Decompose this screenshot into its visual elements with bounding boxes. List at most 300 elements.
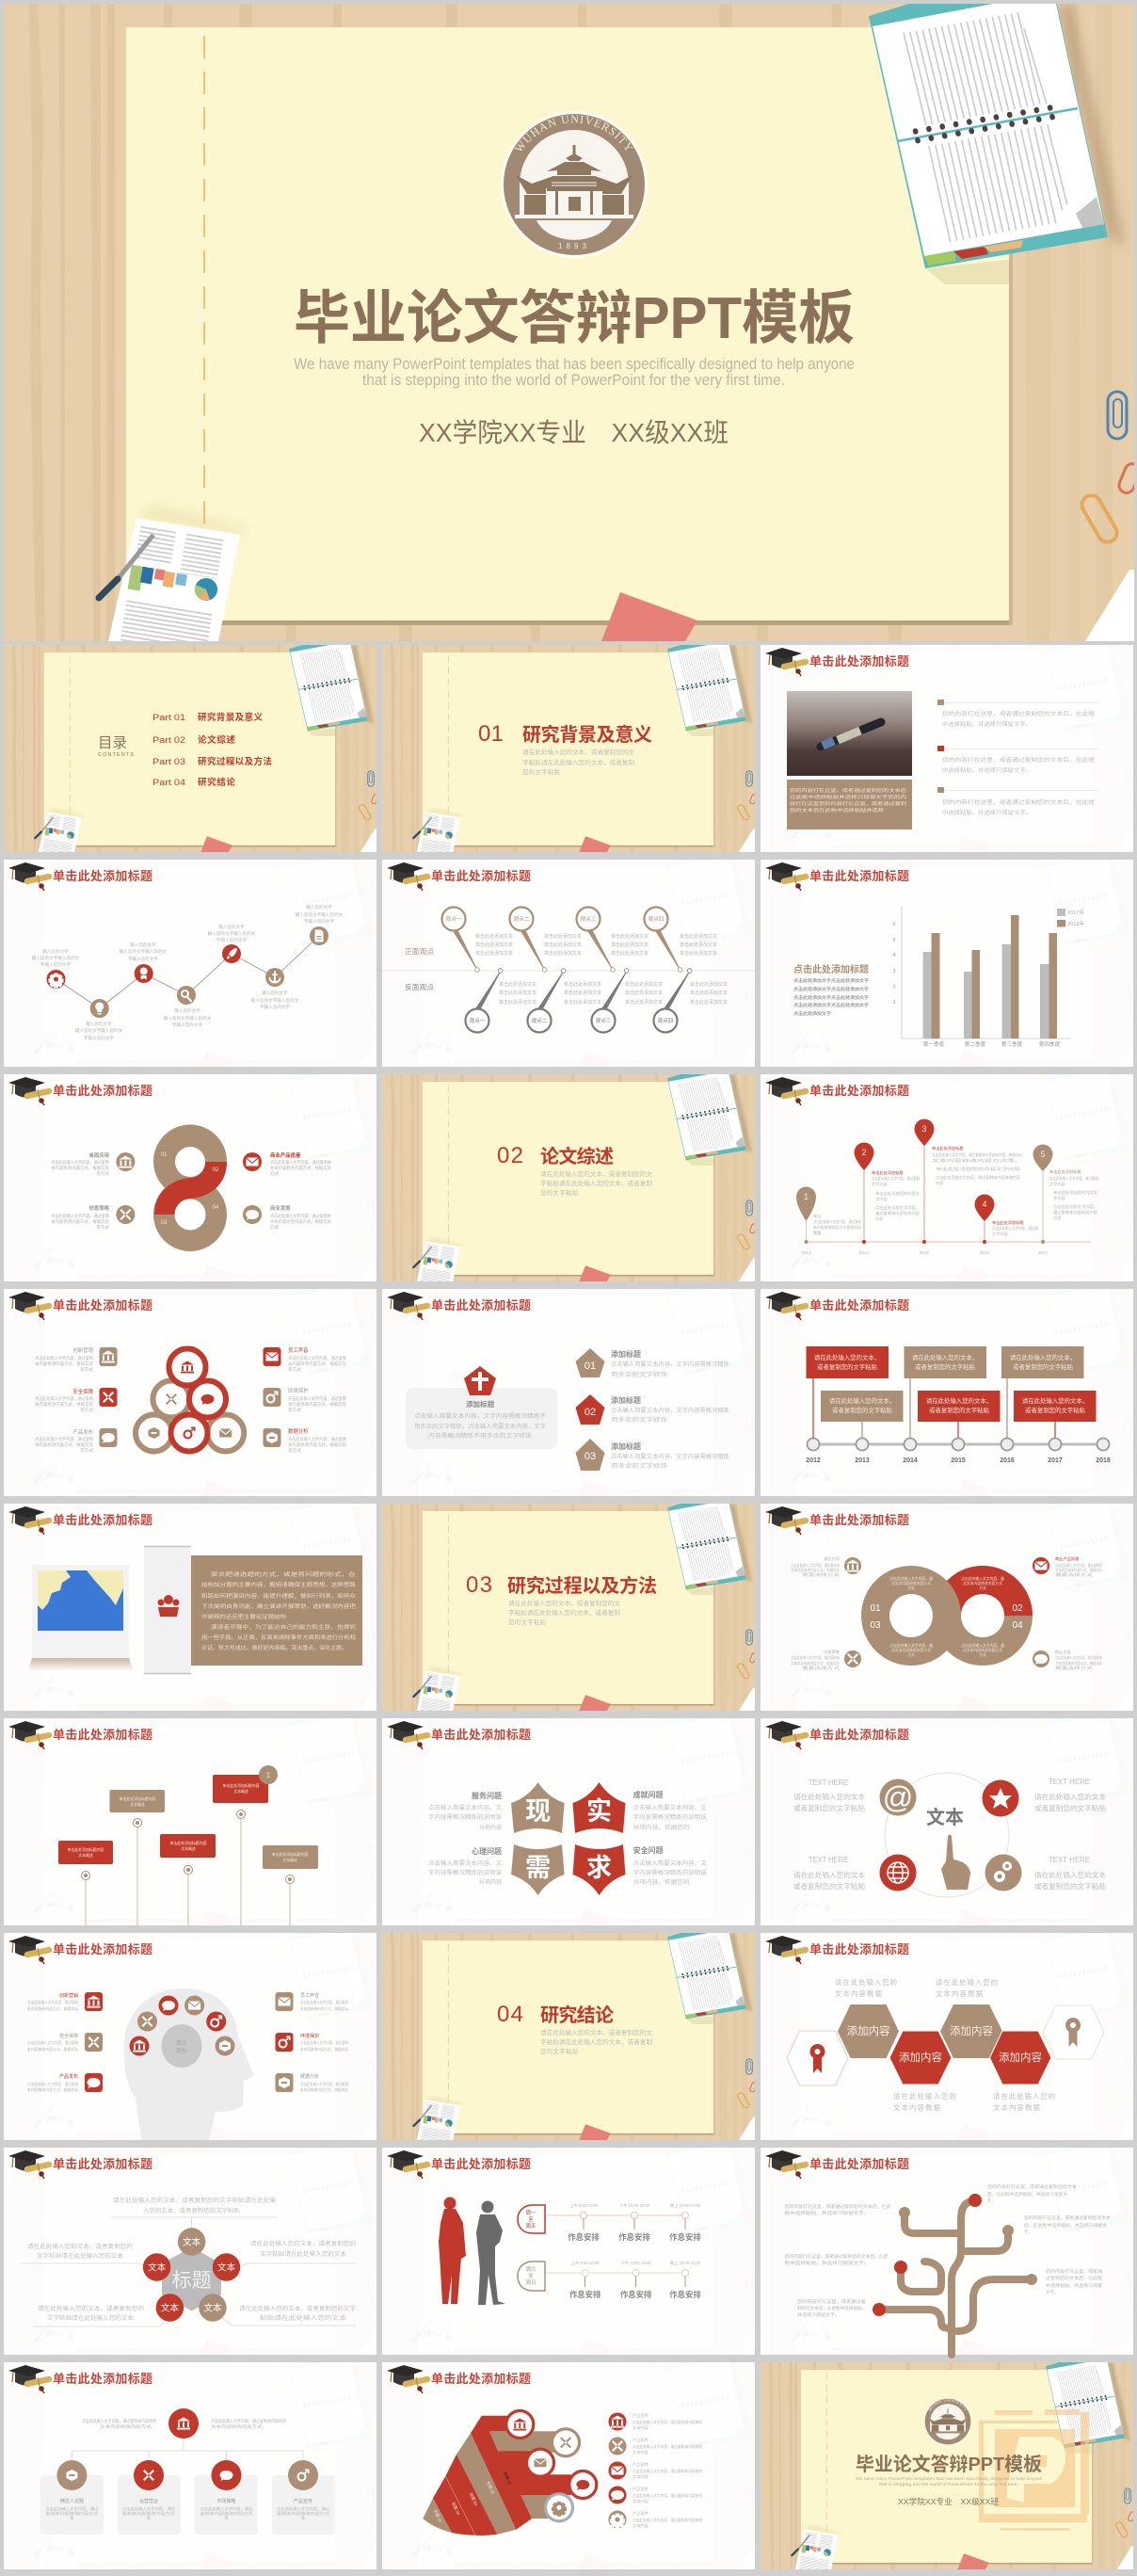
fishbone diagram: 观点三 <box>581 916 597 923</box>
side icons <box>85 1992 294 2092</box>
section text <box>540 1169 653 1197</box>
center goal <box>162 2024 201 2068</box>
header <box>387 1292 531 1320</box>
chart title and text: 点击此处添加标题 <box>793 963 869 975</box>
timeline text: 点击此处添加文字内容， <box>1053 1203 1097 1210</box>
fishbone text: 单击此处添加文本 <box>611 933 649 940</box>
side text: 数据分析 <box>300 2073 319 2080</box>
timeline text: 字内容 <box>1053 1195 1065 1201</box>
chart legend: 2017年 <box>1067 909 1084 916</box>
bar chart: 第三季度 <box>1001 1040 1023 1048</box>
side text: 点击此处输入文字内容，通过复制 <box>300 2081 348 2087</box>
zigzag labels: 输入您的文字输入您的文 <box>120 948 168 955</box>
contents list: Part 03 <box>152 757 185 767</box>
side labels: 反面观点 <box>405 982 434 991</box>
timeline text: 内容 <box>875 1216 883 1222</box>
text boxes: 单击此处添加标题内容 <box>170 1841 207 1845</box>
header: 单击此处添加标题 <box>53 1728 152 1742</box>
bar chart: 第四季度 <box>1039 1040 1061 1048</box>
labels right: 商业发展 <box>270 1204 291 1212</box>
header <box>387 862 531 891</box>
pentagon items: 01 <box>585 1360 596 1372</box>
panel text: 点击此处输入文字内容，通过 <box>122 2505 176 2512</box>
header <box>765 648 909 676</box>
left text: 本内容修改内容方式，根据实际 <box>35 1360 93 1367</box>
right text: 等方式 <box>288 1366 301 1373</box>
section text: 您的文字粘贴 <box>508 1618 547 1626</box>
side text: 本内容修改内容方式，根据实际 <box>27 2046 78 2053</box>
right text: 字内容需概况精炼的说明该 <box>633 1869 707 1876</box>
text boxes: 单击此处添加标题内容 <box>68 1847 104 1852</box>
closing subtitle: that is stepping into the world of PowerPoint for the very first time. <box>879 2482 1018 2487</box>
side text: 本内容修改内容方式，根据实际 <box>300 2005 348 2012</box>
timeline text: 点击此处输入文字内容，通过复制 <box>813 1218 861 1225</box>
section text: 字粘贴请在此处输入您的文本，或者复制 <box>522 758 634 766</box>
labels left: 点击此处输入文字内容，通过复制 <box>51 1213 109 1219</box>
zigzag labels: 输入您的文字输入您的文 <box>75 1027 123 1034</box>
four word shapes: 实 <box>586 1797 612 1826</box>
contents list <box>152 712 272 788</box>
header: 单击此处添加标题 <box>809 1942 909 1956</box>
bar chart: 3 <box>892 969 896 974</box>
infinity rings: 02 <box>1012 1603 1023 1614</box>
text list: 您的内容打在这里，或者通过复制您的文本后，在此框 <box>942 798 1095 806</box>
timeline: 2013 <box>801 1250 811 1255</box>
slide: cover <box>4 4 1134 641</box>
right text: 分项内容，依据您的 <box>633 1878 690 1886</box>
tree text: 字。 <box>1024 2229 1033 2234</box>
side text: 本内容修改内容方式，根据实际 <box>27 2005 78 2012</box>
pentagon items: 点击输入简要文本内容，文字内容需概况精炼 <box>611 1360 729 1368</box>
figure eight diagram: 02 <box>213 1167 219 1173</box>
header: 单击此处添加标题 <box>53 2157 152 2171</box>
right text: 等方式 <box>288 1407 301 1413</box>
slide: figure eight <box>4 1073 379 1287</box>
zigzag labels: 输入您的文字输入您的文 <box>164 1015 212 1022</box>
corner text: 文本内容修改内容方式，根据实际 <box>791 1567 840 1573</box>
header: 单击此处添加标题 <box>53 1084 152 1098</box>
side text: 点击此处输入文字内容，通过复制 <box>27 1999 78 2005</box>
zigzag labels: 输入您的文字 <box>86 1021 112 1027</box>
timeline text: 内容 <box>1053 1215 1061 1221</box>
fishbone text: 单击此处添加文本 <box>564 999 601 1006</box>
text boxes: 文本概述 <box>181 1846 196 1851</box>
timeline text: 点击此处输入文字内容，通过复制本内容修改内容，根据实际 <box>932 1151 1022 1158</box>
title: 毕业论文答辩PPT模板 <box>294 286 855 351</box>
four word shapes: 求 <box>586 1854 612 1882</box>
section text: 字粘贴请在此处输入您的文本，或者复制 <box>508 1608 620 1617</box>
infinity rings: 点击此处输入文字内容，通 <box>889 1643 933 1648</box>
schedule row: weekdays: 作息安排 <box>568 2232 600 2242</box>
header <box>765 2150 909 2179</box>
cone diagram: 标题 02 <box>485 2480 497 2496</box>
brown text panel <box>191 1555 362 1666</box>
labels left <box>51 1151 110 1231</box>
schedule row: weekend: 上午 8:00-12:00 <box>571 2260 600 2266</box>
header: 单击此处添加标题 <box>53 1298 152 1312</box>
header: 单击此处添加标题 <box>809 654 909 668</box>
brown text box: 容打在这里您的内容打在这里，或者通过复制 <box>790 800 907 807</box>
year axis: 2017 <box>1048 1457 1063 1464</box>
side text: 点击此处输入文字内容，通过复制 <box>27 2081 78 2087</box>
panel: add title: 点击输入简要文本内容，文字内容需概况精炼不 <box>414 1412 546 1420</box>
bar chart <box>892 906 1071 1048</box>
timeline boxes: 请在此处输入您的文本， <box>1010 1353 1076 1361</box>
brown text panel: 用一些手段。从正面，反面来阐释事件方面和来进行分析和 <box>201 1634 356 1641</box>
section number and title: 论文综述 <box>540 1145 614 1167</box>
petal diagram: 文本 <box>203 2303 222 2314</box>
left text: 本内容修改内容方式，根据实际 <box>35 1401 93 1408</box>
timeline text: 单击此处添加标题 <box>932 1145 964 1151</box>
slide: ring pyramid <box>4 1288 379 1502</box>
chart title and text: 点击此处添加文字点击此处添加文字 <box>793 994 869 1001</box>
side text: 员工声音 <box>300 1992 319 1999</box>
timeline text <box>813 1145 1098 1237</box>
hexagon captions <box>835 1978 1055 2112</box>
left text: 点击输入简要文本内容。文 <box>428 1804 502 1811</box>
pentagon items: 添加标题 <box>611 1395 641 1405</box>
schedule row: weekend: 周六 <box>526 2265 536 2273</box>
list text: 文本内容 <box>633 2498 649 2504</box>
right text: 环境保护 <box>288 1387 309 1394</box>
hexagon chain: 添加内容 <box>950 2024 993 2037</box>
left text: 分项内容 <box>479 1878 502 1886</box>
corner text: 点击此处输入文字内容，通过复制本 <box>1055 1654 1103 1661</box>
fishbone text: 单击此处添加文本 <box>690 981 728 988</box>
side text: 点击此处输入文字内容，通过复制 <box>300 2039 348 2046</box>
left text: 点击输入简要文本内容。文 <box>428 1860 502 1867</box>
timeline text: 通过复制本内容修改内容 <box>875 1210 920 1216</box>
fishbone text: 单击此处添加文本 <box>475 942 513 948</box>
fishbone diagram: 观点四 <box>658 1018 674 1024</box>
list text: 点击此处输入文字内容，通过复制本内容修改 <box>633 2492 703 2499</box>
schedule row: weekdays: 作息安排 <box>618 2232 650 2242</box>
timeline text: 单击此处添加标题 <box>1049 1168 1081 1175</box>
schedule row: weekend: 至 <box>528 2273 534 2279</box>
tree text: 您的内容打在这里，或者通过复 <box>797 2298 867 2305</box>
side labels <box>405 947 434 991</box>
section text: 请在此处输入您的文本，或者复制您的文 <box>508 1599 621 1607</box>
labels right: 文本内容修改内容方式，根据实际 <box>270 1165 331 1171</box>
right text: 点击输入简要文本内容。文 <box>633 1804 707 1811</box>
middle card with people icon <box>144 1546 191 1674</box>
petal diagram: 文本 <box>161 2303 179 2314</box>
side text: 安全保障 <box>59 2033 78 2039</box>
slide: map and text <box>4 1503 379 1716</box>
panel: add title: 添加标题 <box>466 1399 495 1409</box>
chart title and text: 点击此处添加文字 <box>793 1010 831 1017</box>
header: 单击此处添加标题 <box>431 2157 531 2171</box>
section number and title: 研究结论 <box>540 2004 614 2026</box>
zigzag labels: 字输入您的文字 <box>304 918 334 925</box>
tree text: 并选择只保留文字。 <box>797 2311 840 2318</box>
hexagon captions: 请在此处输入您的 <box>993 2092 1055 2101</box>
schedule row: weekdays: 晚上 19:00-22:00 <box>670 2202 701 2209</box>
header <box>765 1506 909 1535</box>
panel text: 市场策略 <box>216 2498 236 2504</box>
panel text: 等 <box>147 2515 151 2520</box>
slide: schedule <box>382 2147 758 2360</box>
header <box>387 2365 531 2393</box>
tree text: 您的内容打在这里，或者通过复制您的文本 <box>1024 2214 1112 2221</box>
section text: 字粘贴请在此处输入您的文本，或者复制 <box>540 1179 652 1187</box>
section text: 您的文字粘贴 <box>540 2047 579 2055</box>
slide: fishbone <box>382 859 758 1072</box>
fishbone text: 单击此处添加文本 <box>680 933 717 940</box>
figure eight diagram: 03 <box>161 1220 168 1226</box>
text list <box>937 700 1098 816</box>
corner text: 商业产品质量 <box>1055 1555 1079 1562</box>
infinity rings: 过文本内容修改内容方式 <box>963 1648 1002 1652</box>
right text <box>288 1346 346 1454</box>
panel: add title: 用多余的文字修饰，点击输入简要文本内容，文字 <box>414 1423 546 1430</box>
chart title and text: 点击此处添加文字点击此处添加文字 <box>793 977 869 984</box>
icon ring <box>879 1773 1022 1897</box>
infinity rings: 方式 <box>979 1586 986 1590</box>
brown text box <box>787 780 912 829</box>
section text: 字粘贴请在此处输入您的文本，或者复制 <box>540 2037 652 2046</box>
side text: 环境保护 <box>300 2033 319 2039</box>
closing department line: XX学院XX专业 XX级XX班 <box>898 2496 999 2506</box>
zigzag labels: 输入您的文字 <box>42 948 69 955</box>
slide: pin timeline <box>761 1073 1136 1287</box>
tree text: 制您的文本后，在此框中选择粘贴， <box>797 2305 866 2311</box>
contents list: 研究背景及意义 <box>198 712 263 723</box>
pentagon items <box>576 1348 729 1471</box>
tree diagram <box>873 2194 1037 2355</box>
year axis: 2013 <box>855 1457 870 1464</box>
side text <box>27 1992 348 2093</box>
left text: 等方式 <box>80 1407 93 1413</box>
petal diagram: 文本 <box>217 2262 235 2273</box>
ring text: 或者复制您的文字粘贴 <box>1034 1882 1106 1891</box>
fishbone diagram: 观点二 <box>514 916 530 923</box>
hexagon captions: 文本内容数据 <box>936 1989 984 1998</box>
logo: Wuhan University seal: WUHAN UNIVERSITY <box>514 115 633 151</box>
list text: 点击此处输入文字内容，通过复制本内容修改 <box>633 2443 703 2450</box>
infinity rings: 方式 <box>907 1652 915 1657</box>
left text <box>428 1791 502 1886</box>
right text: 成就问题 <box>633 1790 664 1799</box>
fishbone text: 单击此处添加文本 <box>499 990 536 996</box>
text list: 中选择粘贴，并选择只保留文字。 <box>942 766 1032 774</box>
ring text: 请在此处输入您的文本 <box>793 1871 865 1879</box>
slide: four words <box>382 1717 758 1931</box>
ring text: TEXT HERE <box>1049 1778 1090 1786</box>
hexagon captions: 文本内容数据 <box>993 2103 1041 2112</box>
header <box>765 862 909 891</box>
text list: 您的内容打在这里，或者通过复制您的文本后，在此框 <box>942 756 1095 764</box>
right text: 点击输入简要文本内容。文 <box>633 1860 707 1867</box>
header <box>8 2150 152 2179</box>
subtitle <box>294 355 855 389</box>
timeline text: 文字内容 <box>872 1181 888 1187</box>
labels left: 桌面应用 <box>88 1151 109 1159</box>
logo: Wuhan University seal <box>924 2397 971 2446</box>
panel text: 复制本内容修改内容方式 <box>200 2510 253 2517</box>
header <box>765 1721 909 1749</box>
tree text: 框中选择粘贴，并选择只保留文字。 <box>785 2210 870 2216</box>
figure eight diagram: 04 <box>213 1205 219 1211</box>
timeline text: 单击 <box>813 1213 821 1219</box>
ring text: 请在此处输入您的文本 <box>1034 1793 1106 1801</box>
petal text: 请在此处输入您的文本，或者复制您的 <box>250 2240 356 2247</box>
timeline text: 需要 <box>813 1231 821 1236</box>
header: 单击此处添加标题 <box>809 2157 909 2171</box>
infinity rings: 01 <box>870 1603 881 1614</box>
schedule row: weekend <box>518 2260 701 2299</box>
text boxes: 单击此处添加标题内容 <box>223 1783 260 1788</box>
left text: 字内容需概况精炼的说明该 <box>428 1813 502 1821</box>
fishbone text: 单击此处添加文本 <box>625 999 663 1006</box>
infinity rings: 点击此处输入文字内容，通 <box>961 1576 1004 1581</box>
zigzag labels: 输入您的文字 <box>130 942 156 948</box>
list icons <box>608 2412 627 2529</box>
bar chart: 5 <box>892 938 896 943</box>
panel text: 等 <box>224 2515 229 2520</box>
post lines <box>81 1810 294 1925</box>
schedule row: weekdays: 下午 13:00-18:00 <box>619 2202 650 2209</box>
map frame <box>28 1565 134 1671</box>
ring text: 或者复制您的文字粘贴 <box>793 1804 865 1812</box>
slide: post boxes <box>4 1717 379 1931</box>
corner text: 商业发展 <box>1055 1649 1072 1655</box>
schedule row: weekend: 周日 <box>526 2279 536 2286</box>
fishbone text: 单击此处添加文本 <box>544 933 582 940</box>
zigzag labels: 字输入您的文字 <box>40 961 71 968</box>
header: 单击此处添加标题 <box>809 1728 909 1742</box>
icon ring: @ <box>883 1780 913 1814</box>
fishbone text: 单击此处添加文本 <box>544 942 582 948</box>
left text: 字内容需概况精炼的说明该 <box>428 1869 502 1876</box>
slide: section 03 <box>382 1503 758 1716</box>
schedule row: weekdays: 上午 8:00-12:00 <box>569 2202 598 2209</box>
header: 单击此处添加标题 <box>53 1942 152 1956</box>
fishbone text: 单击此处添加文本 <box>475 950 513 957</box>
text boxes: 单击此处添加标题内容 <box>120 1796 156 1801</box>
panel text: 精达人议题 <box>60 2498 84 2504</box>
timeline text: 文本内容修改内容方式等。 <box>932 1157 1022 1164</box>
section text <box>508 1599 621 1626</box>
brown text panel: 演讲者开展中，为了能达自己的能力和主张，也得到 <box>211 1623 356 1631</box>
section number and title <box>466 1572 657 1598</box>
fishbone text: 单击此处添加文本 <box>564 981 601 988</box>
brown text panel: 下次阐明自身功能，确立演讲开展策划，选好概况内容把 <box>201 1602 356 1610</box>
section number and title: 03 <box>466 1572 492 1598</box>
list text: 产品宣传 <box>633 2437 649 2443</box>
side text: 本内容修改内容方式，根据实际 <box>300 2046 348 2053</box>
left text: 等方式 <box>80 1447 93 1454</box>
timeline boxes: 请在此处输入您的文本， <box>814 1353 880 1361</box>
slide: hexagons <box>761 1932 1136 2146</box>
icon: pointing hand <box>941 1834 970 1890</box>
list text: 产品宣传 <box>633 2510 649 2517</box>
labels left: 等方式 <box>96 1224 109 1231</box>
left text: 安全保障 <box>72 1388 94 1395</box>
corner text: 文本内容修改内容方式，根据实际 <box>1055 1567 1102 1573</box>
side icons <box>100 1347 280 1447</box>
labels right <box>270 1151 331 1231</box>
schedule row: weekend: 作息安排 <box>620 2290 652 2299</box>
panel text: 复制本内容修改内容方式 <box>45 2510 99 2517</box>
head silhouette <box>124 1988 254 2140</box>
infinity rings: 方式 <box>907 1586 915 1590</box>
slide: title petals <box>4 2147 379 2360</box>
timeline text: 文字内容 <box>1049 1181 1065 1187</box>
right text <box>633 1790 707 1886</box>
ring text: TEXT HERE <box>809 1856 848 1864</box>
left text: 本内容修改内容方式，根据实际 <box>35 1441 93 1448</box>
zigzag labels: 输入您的文字输入您的文 <box>296 911 344 918</box>
labels left: 本内容修改内容方式，根据实际 <box>51 1218 109 1225</box>
schedule row: weekdays: 作息安排 <box>669 2232 701 2242</box>
department line: XX学院XX专业 XX级XX班 <box>419 418 729 447</box>
contents list: 研究过程以及方法 <box>198 756 272 767</box>
timeline boxes: 请在此处输入您的文本， <box>926 1396 992 1405</box>
year axis: 2012 <box>806 1457 821 1464</box>
section text <box>540 2028 653 2055</box>
contents heading <box>98 734 134 758</box>
ring text: 请在此处输入您的文本 <box>793 1793 865 1801</box>
ring text <box>793 1778 1106 1891</box>
corner text: 文本内容修改内容方式，根据实际 <box>1055 1660 1102 1666</box>
pentagon items: 03 <box>585 1451 596 1462</box>
hexagon chain: 添加内容 <box>899 2051 942 2064</box>
fishbone diagram: 观点四 <box>649 916 665 923</box>
chart title and text: 点击此处添加文字点击此处添加文字 <box>793 986 869 992</box>
list text: 点击此处输入文字内容，通过复制本内容修改 <box>633 2468 703 2474</box>
header: 单击此处添加标题 <box>809 869 909 883</box>
bar chart: 1 <box>892 1000 896 1006</box>
tree text <box>785 2183 1112 2318</box>
slide: photo with text <box>761 644 1136 858</box>
right text: 本内容修改内容方式，根据实际 <box>288 1360 346 1367</box>
left text: 分项内容 <box>479 1824 502 1831</box>
schedule row: weekdays: 周五 <box>526 2223 536 2230</box>
year axis: 2014 <box>903 1457 918 1464</box>
fishbone text: 单击此处添加文本 <box>544 950 582 957</box>
ring text: TEXT HERE <box>809 1779 848 1787</box>
top text <box>82 2418 287 2430</box>
corner text: 需要选择方式 <box>802 1665 841 1671</box>
infinity rings: 03 <box>870 1620 881 1631</box>
header <box>387 1721 531 1749</box>
list text: 产品宣传 <box>633 2461 649 2468</box>
top text: 点击此处输入文字内容，通过复制本内容修改 <box>82 2418 157 2424</box>
header <box>8 1506 152 1535</box>
hexagon captions: 请在此处输入您的 <box>893 2092 956 2101</box>
cone diagram: 标题 05 <box>432 2508 444 2524</box>
list text: 产品宣传 <box>633 2412 649 2419</box>
pentagon items: 用多余的文字修饰 <box>611 1462 667 1470</box>
tree text: 后，在此框中选择粘贴，并选择只保留文 <box>987 2191 1068 2198</box>
petal text: 文字粘贴请在此处输入您的文本 <box>47 2314 134 2322</box>
section text <box>522 748 635 776</box>
text boxes: 文本概述 <box>130 1802 145 1807</box>
labels right: 点击此处输入文字内容，通过复制本 <box>270 1213 331 1219</box>
corner text: 点击此处输入文字内容，通过复制本 <box>791 1562 841 1569</box>
four word shapes: 现 <box>525 1797 551 1826</box>
top text: 文本内容修改内容方式。 <box>211 2423 267 2430</box>
petal text: 请在此处输入您的文本，或者复制您的 <box>27 2243 133 2250</box>
cone diagram <box>423 2416 571 2536</box>
year axis <box>806 1378 1111 1464</box>
side text: 创新营销 <box>59 1992 78 1999</box>
contents list: 论文综述 <box>198 734 235 746</box>
text list: 您的内容打在这里，或者通过复制您的文本后，在此框 <box>942 710 1095 717</box>
contents heading: 目录 <box>98 734 127 751</box>
zigzag labels: 字输入您的文字 <box>260 1004 290 1010</box>
